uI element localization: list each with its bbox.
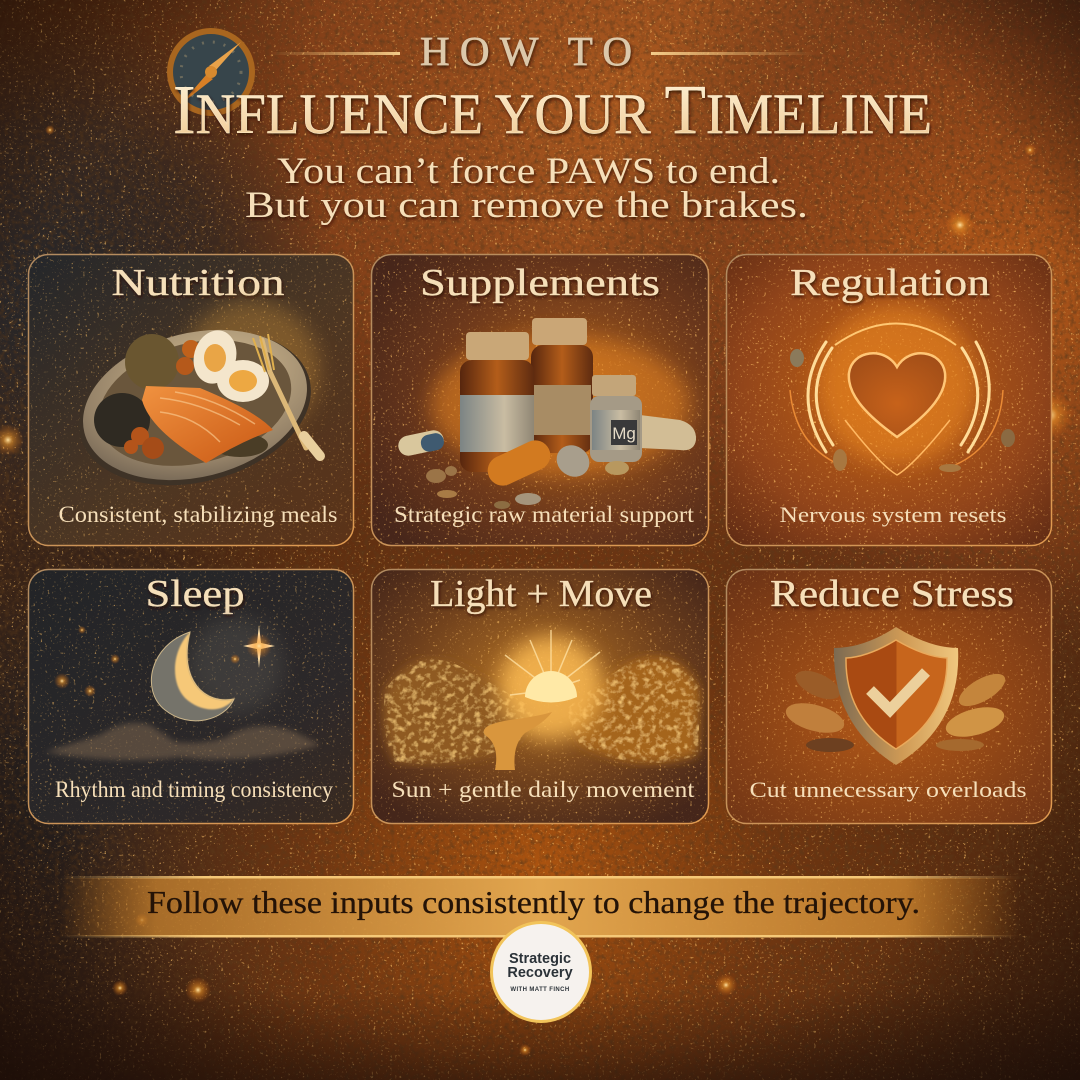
caption: Nervous system resets bbox=[780, 502, 1006, 527]
header bbox=[167, 28, 932, 226]
panel: reduce stress bbox=[726, 570, 1052, 824]
heading rule right bbox=[651, 52, 816, 55]
heading: how to: HOW TO bbox=[420, 28, 632, 74]
panel: supplements bbox=[372, 254, 708, 546]
icon: glowing heart with pulse arcs bbox=[790, 305, 1015, 475]
heading: Light + Move bbox=[430, 573, 652, 615]
subtitle: You can’t force PAWS to end. bbox=[277, 151, 780, 192]
banner text: Follow these inputs consistently to change the trajectory. bbox=[147, 884, 920, 920]
heading: Reduce Stress bbox=[770, 573, 1014, 615]
icon: crescent moon and clouds bbox=[45, 617, 320, 760]
caption: Sun + gentle daily movement bbox=[392, 777, 695, 802]
icon: supplement bottles and pills bbox=[396, 318, 696, 509]
icon: shield with check mark bbox=[783, 627, 1010, 765]
icon: plate of salmon and eggs bbox=[63, 300, 327, 508]
icon: compass bbox=[167, 28, 255, 116]
logo badge: Strategic bbox=[509, 951, 571, 967]
caption: Consistent, stabilizing meals bbox=[58, 502, 338, 527]
logo badge bbox=[492, 922, 590, 1022]
heading rule left bbox=[269, 52, 400, 55]
panel: regulation bbox=[726, 254, 1052, 546]
panel: sleep bbox=[28, 570, 354, 824]
heading: Sleep bbox=[146, 573, 244, 615]
icon: supplement bottles and pills: Mg bbox=[612, 424, 636, 443]
heading: Nutrition bbox=[112, 262, 284, 304]
caption: Cut unnecessary overloads bbox=[750, 777, 1026, 802]
caption: Rhythm and timing consistency bbox=[55, 777, 333, 802]
icon: sunrise over path bbox=[384, 630, 700, 770]
panel: nutrition bbox=[28, 254, 354, 546]
title: INFLUENCE YOUR TIMELINE bbox=[173, 72, 932, 149]
subtitle: But you can remove the brakes. bbox=[245, 185, 808, 226]
panel: light and move bbox=[372, 570, 708, 824]
subtitle bbox=[245, 151, 808, 226]
heading: Regulation bbox=[790, 262, 990, 304]
logo badge: Recovery bbox=[507, 965, 573, 981]
callout banner bbox=[60, 876, 1020, 938]
heading: Supplements bbox=[420, 262, 660, 304]
caption: Strategic raw material support bbox=[394, 502, 695, 527]
logo badge: WITH MATT FINCH bbox=[510, 987, 570, 993]
